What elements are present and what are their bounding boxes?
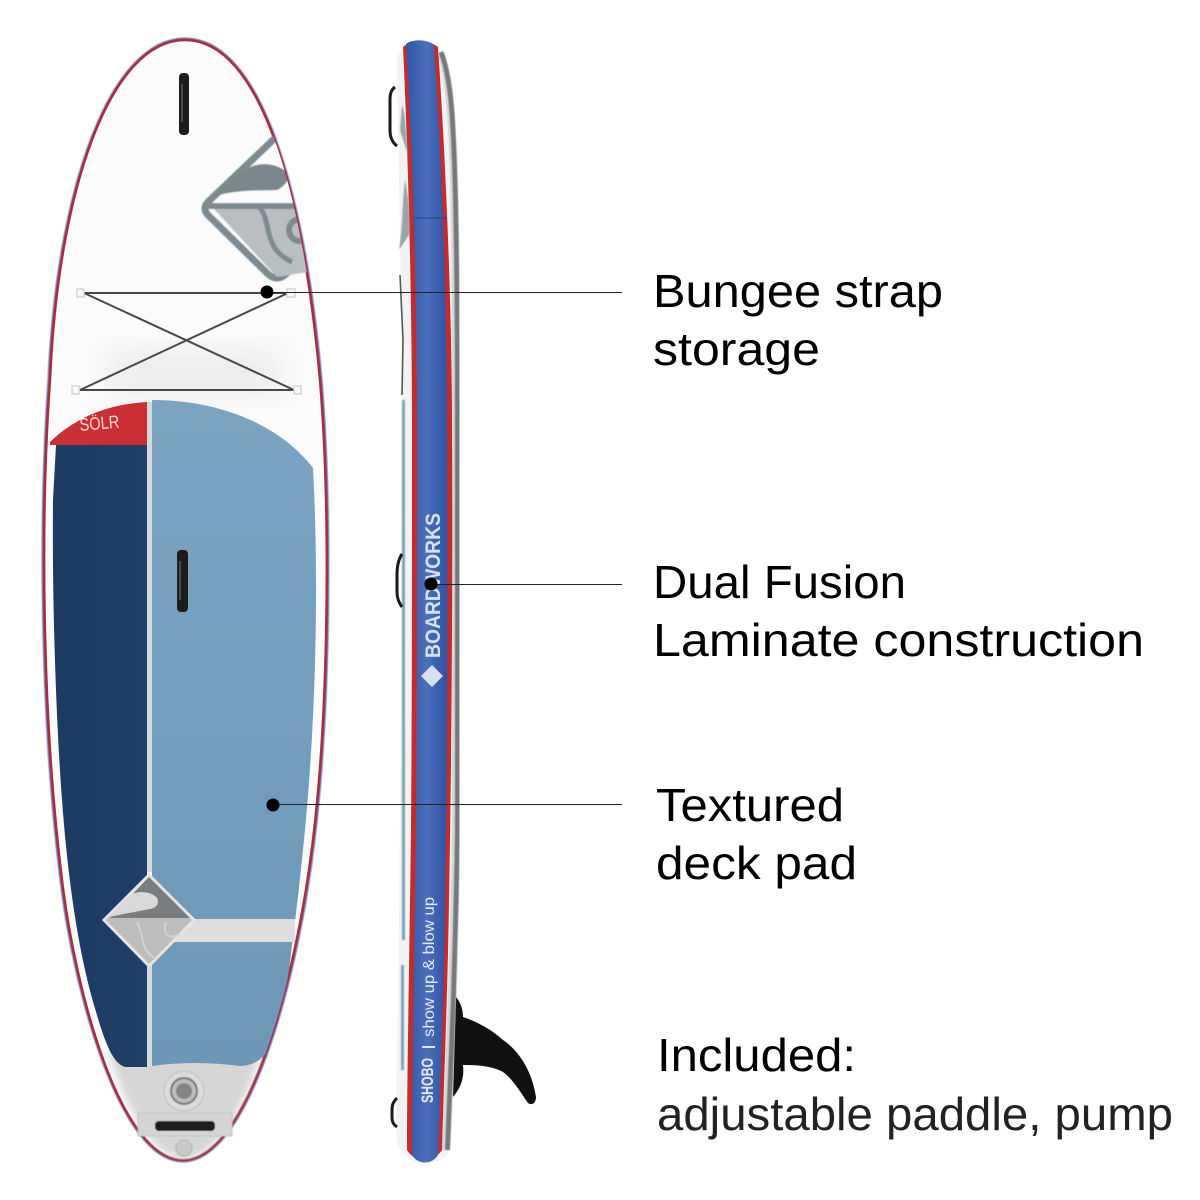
board artwork clipped to deck [50,135,316,1160]
bungee straps [80,293,294,390]
Boardworks wordmark: BOARDWORKS [422,513,445,658]
tagline: show up & blow up [421,897,438,1037]
label: textured deck pad [656,779,857,889]
blue tube [406,40,447,1163]
side handle top [390,87,397,146]
bungee anchors [72,289,301,394]
label: dual fusion laminate: Laminate construction [653,614,1144,666]
navy deck pad [53,445,147,1067]
SOLR red block [50,402,147,445]
lower stringer line [147,966,152,1066]
inflation valve [164,1071,204,1111]
side body [397,40,460,1163]
tail diamond logo [104,875,194,966]
deck shading [114,352,276,393]
grey rail [441,52,458,1150]
light grey rail strip [441,54,455,1150]
red stripes [403,42,452,1159]
center handle [177,550,188,612]
tail handle [138,1113,232,1136]
label: dual fusion laminate [653,556,1144,666]
nose logo [200,135,307,282]
tail grey area [108,1050,262,1160]
side graphic [399,105,409,250]
board deck outline [44,40,327,1160]
divider mark [422,1046,435,1048]
Shobo wordmark: SHOBO [418,1058,437,1103]
side pad edge [401,400,405,1070]
SOLR label: SÖLR [79,412,120,435]
leash ring [176,1140,192,1156]
tube seam [414,217,447,219]
Boardworks logo [421,665,443,687]
side handle middle [397,554,402,607]
fin [453,997,536,1104]
label: included accessories: Included: [657,1029,856,1081]
side handle tail [392,1098,397,1127]
label: bungee strap storage: storage [653,323,820,375]
center stringer line [147,402,152,872]
traction strap [170,919,295,942]
paddle board side view [390,40,536,1163]
label: dual fusion laminate: Dual Fusion [653,556,906,608]
label: textured deck pad: Textured [656,779,844,831]
label: textured deck pad: deck pad [656,837,857,889]
label: included accessories: adjustable paddle, pump [657,1088,1173,1140]
label: included accessories [657,1029,1173,1140]
light blue deck pad [152,400,316,1066]
label: bungee strap storage: Bungee strap [653,265,943,317]
callout: deck pad leader [266,798,622,812]
label: bungee strap storage [653,265,943,375]
outer blue rail edge [43,39,328,1161]
paddle board top view [43,39,350,1161]
callout: laminate leader [424,578,622,590]
callout: bungee strap leader [260,286,622,298]
side bungee [400,275,403,395]
nose handle [179,73,189,135]
